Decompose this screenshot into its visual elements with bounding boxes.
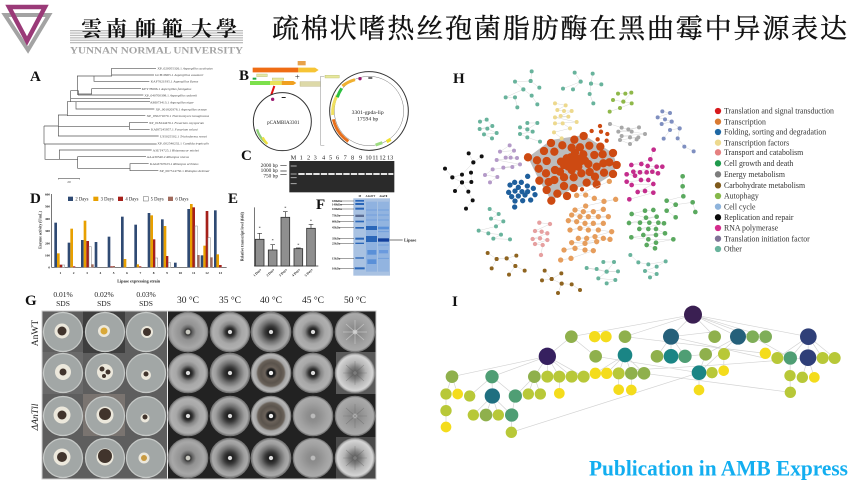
temperature column headers: 35 °C — [219, 295, 241, 306]
plasmid maps: + — [295, 72, 300, 82]
gel with marker labels: 45kDa — [332, 226, 341, 230]
gel with marker labels: 100kDa — [332, 207, 342, 211]
SDS column headers: SDS — [56, 299, 70, 308]
icon: university logo — [5, 7, 49, 50]
temperature column headers: 45 °C — [302, 295, 324, 306]
legend: Cell cycle — [724, 202, 756, 211]
panel E label: E — [228, 191, 238, 207]
tree branches and leaves: KEY78696.1 Aspergillus fumigatus — [142, 87, 192, 91]
tree branches and leaves: ABI073413.1 Aspergillus niger — [150, 100, 195, 104]
bars and axes: 2 Days — [265, 267, 276, 277]
panel D label: D — [30, 191, 41, 207]
bars and axes: * — [297, 243, 299, 248]
gel with marker labels: 140kDa — [332, 202, 342, 206]
legend: Folding, sorting and degradation — [724, 128, 826, 137]
cluster: transport and catabolism — [533, 223, 550, 255]
gel with marker labels: 10kDa — [332, 266, 341, 270]
panel D: enzyme activity bar chart — [30, 191, 227, 283]
panel F label: F — [316, 197, 325, 213]
bars and axes: 3 Days — [278, 267, 288, 277]
bars, axes and legend: 4 Days — [125, 198, 139, 203]
gel image: 750 bp — [263, 174, 278, 180]
strain row labels: ΔAnTll — [31, 403, 41, 431]
university name logotype: 雲南師範大學 — [81, 17, 237, 41]
tree branches and leaves: KAG6767023.1 Rhizopus arrhizus — [150, 162, 199, 166]
gel image: 4 — [322, 154, 326, 161]
gel with marker labels: 180kDa — [332, 199, 342, 203]
SDS column headers: 0.01% — [53, 290, 73, 299]
bars, axes and legend — [39, 192, 227, 283]
title: 疏棉状嗜热丝孢菌脂肪酶在黑曲霉中异源表达 — [272, 7, 847, 46]
gel image: 2 — [307, 154, 310, 161]
temperature column headers: 50 °C — [344, 295, 366, 306]
panel H: protein interaction network — [445, 71, 834, 293]
cluster: folding, sorting and degradation — [509, 176, 535, 207]
panel G label: G — [25, 293, 37, 309]
gel image: 13 — [387, 154, 393, 161]
bars, axes and legend: 600 — [45, 192, 50, 196]
bars, axes and legend: 4 — [99, 271, 101, 275]
legend: Other — [724, 245, 742, 254]
cluster: transcription factors — [554, 103, 577, 138]
panel I label: I — [452, 294, 458, 310]
bars, axes and legend: 300 — [45, 229, 50, 233]
bars, axes and legend: 12 — [205, 271, 209, 275]
clusters: carbohydrate metabolism — [488, 253, 580, 293]
bars, axes and legend: 5 — [113, 271, 115, 275]
tree branches and leaves: XP_020055326.1 Aspergillus aculeatus — [157, 66, 213, 70]
bars, axes and legend: 100 — [45, 254, 50, 258]
tree branches and leaves — [44, 66, 213, 184]
strain row labels: AnWT — [31, 320, 41, 346]
SDS column headers — [53, 290, 156, 308]
bars, axes and legend: 3 Days — [101, 198, 114, 203]
panel C: gel electrophoresis — [241, 148, 394, 192]
bars and axes: Relative transcript level (fold) — [240, 211, 244, 261]
cluster: transcription — [561, 181, 616, 260]
gel image: M — [291, 154, 297, 161]
legend: Translation and signal transduction — [724, 107, 834, 116]
tree branches and leaves: A3UT4725.1 Rhizomucor miehei — [153, 148, 199, 152]
tree branches and leaves: XP_018244476.1 Fusarium oxysporum — [149, 121, 205, 125]
plasmid maps — [250, 61, 408, 151]
clusters: other (teal) — [479, 71, 666, 283]
gel image: 5 — [329, 154, 332, 161]
bars and axes: * — [284, 206, 286, 211]
bars, axes and legend: 2 — [73, 271, 75, 275]
SDS column headers: SDS — [139, 299, 153, 308]
legend: Replication and repair — [724, 213, 794, 222]
panel I: hierarchical GO network — [440, 294, 841, 438]
gel image: 1 — [300, 154, 303, 161]
panel G: petri dish grid — [25, 290, 376, 479]
legend: Energy metabolism — [724, 170, 785, 179]
tree branches and leaves: U35025502.1 Trichoderma reesei — [160, 135, 207, 139]
SDS column headers: 0.02% — [94, 290, 114, 299]
legend: Transcription factors — [724, 138, 789, 147]
panel H label: H — [453, 71, 465, 87]
bars, axes and legend: 13 — [219, 271, 222, 275]
panel B: plasmid construction — [239, 61, 408, 151]
bars, axes and legend: 200 — [45, 241, 50, 245]
bars, axes and legend: 5 Days — [151, 198, 164, 203]
panel A: phylogenetic tree — [30, 66, 213, 184]
SDS column headers: SDS — [97, 299, 111, 308]
cluster: RNA polymerase — [627, 150, 662, 199]
gel image: 11 — [372, 154, 378, 161]
plasmid maps: 17594 bp — [357, 117, 378, 123]
bars, axes and legend: 400 — [45, 217, 50, 221]
temperature column headers: 40 °C — [260, 295, 282, 306]
tree branches and leaves: XP_040700398.1 Aspergillus sydowii — [144, 93, 197, 97]
gel with marker labels: 25kDa — [332, 241, 341, 245]
bars, axes and legend: Lipase expressing strain — [117, 278, 161, 283]
bars, axes and legend: 6 — [126, 271, 128, 275]
bars and axes: * — [259, 225, 261, 230]
university name logotype — [70, 17, 243, 56]
legend: Transcription — [724, 117, 766, 126]
gel image: 8 — [351, 154, 354, 161]
panel C label: C — [241, 148, 252, 164]
bars, axes and legend: 2 Days — [75, 198, 89, 203]
cluster: translation initiation — [485, 145, 520, 182]
legend: Cell growth and death — [724, 159, 793, 168]
bars, axes and legend: 9 — [166, 271, 168, 275]
bars, axes and legend: 0 — [48, 266, 50, 270]
bars, axes and legend: 8 — [153, 271, 155, 275]
legend: Carbohydrate metabolism — [724, 181, 805, 190]
gel image: 9 — [359, 154, 362, 161]
plasmid maps: pCAMBIA3301 — [267, 121, 300, 126]
gel with marker labels: Lipase — [404, 238, 416, 243]
hierarchical graph — [440, 306, 841, 438]
temperature column headers: 30 °C — [177, 295, 199, 306]
cluster: energy metabolism — [610, 124, 645, 144]
bars, axes and legend: 500 — [45, 205, 50, 209]
bars, axes and legend: Enzyme activity (U/mL) — [39, 210, 43, 249]
plate backgrounds — [42, 311, 376, 479]
legend: RNA polymerase — [724, 224, 779, 233]
tree branches and leaves: KAF7621935.1 Aspergillus flavus — [151, 80, 199, 84]
strain row labels — [31, 320, 41, 431]
legend — [715, 107, 834, 254]
tree branches and leaves: XP_001820378.1 Aspergillus oryzae — [156, 107, 207, 111]
tree branches and leaves: XP_050271070.1 Thermomyces lanuginosus — [147, 114, 210, 118]
cluster: translation initiation factor — [658, 111, 694, 151]
temperature column headers — [177, 295, 366, 306]
gel image: 2000 bp — [261, 163, 278, 169]
bars and axes — [240, 206, 318, 277]
tree branches and leaves: 20 — [67, 180, 71, 184]
bars, axes and legend: 11 — [192, 271, 196, 275]
bars, axes and legend: 6 Days — [175, 198, 189, 203]
tree branches and leaves: XP_002546232.1 Candida tropicalis — [157, 142, 209, 146]
gel with marker labels: 60kDa — [332, 219, 341, 223]
panel E: relative transcript bar chart — [228, 191, 318, 277]
gel with marker labels: 15kDa — [332, 256, 341, 260]
gel with marker labels: AnaTll — [379, 195, 388, 198]
university name logotype: YUNNAN NORMAL UNIVERSITY — [70, 46, 243, 56]
plasmid maps: 3301-gpda-lip — [352, 110, 384, 116]
panel F: SDS-PAGE gel — [316, 195, 416, 276]
SDS column headers: 0.03% — [136, 290, 156, 299]
bars, axes and legend: 1 — [59, 271, 61, 275]
cluster: replication and repair — [445, 153, 482, 209]
gel with marker labels: 35kDa — [332, 236, 341, 240]
temperature plates — [168, 312, 375, 478]
bars and axes: 5 Days — [304, 267, 314, 277]
bars and axes: 4 Days — [291, 267, 301, 277]
bars, axes and legend: 10 — [179, 271, 182, 275]
tree branches and leaves: AAA30540.2 Rhizopus niveus — [147, 155, 190, 159]
gel image: 7 — [344, 154, 347, 161]
bars and axes: 1 Days — [252, 267, 263, 277]
gel with marker labels — [332, 195, 416, 276]
tree branches and leaves: KAI87245957.1 Fusarium solani — [151, 128, 198, 132]
gel with marker labels: 75kDa — [332, 214, 341, 218]
cluster: cell growth and death — [629, 176, 695, 248]
gel image: 6 — [336, 154, 339, 161]
legend: Transport and catabolism — [724, 148, 803, 157]
gel image: 3 — [314, 154, 317, 161]
cluster: autophagy — [610, 93, 632, 112]
SDS plates with colonies — [44, 312, 166, 478]
bars, axes and legend: 7 — [139, 271, 141, 275]
cluster: translation and signal transduction — [528, 126, 617, 201]
gel image: 10 — [365, 154, 372, 161]
panel B label: B — [239, 68, 249, 84]
bars and axes: * — [310, 219, 312, 224]
network graph — [445, 71, 834, 293]
footer: publication note: Publication in AMB Express — [589, 456, 848, 480]
panel A label: A — [30, 69, 41, 85]
gel with marker labels: ΔAnWT — [366, 195, 375, 198]
gel image: 1000 bp — [261, 168, 278, 174]
legend: Autophagy — [724, 192, 759, 201]
gel image — [261, 154, 394, 192]
bars and axes: * — [272, 238, 274, 243]
gel image: 12 — [379, 154, 386, 161]
bars, axes and legend: 3 — [86, 271, 88, 275]
legend: Translation initiation factor — [724, 234, 810, 243]
tree branches and leaves: XP_067514750.1 Rhizopus delemar — [159, 169, 210, 173]
gel with marker labels: M — [359, 195, 362, 198]
tree branches and leaves: GCB19905.1 Aspergillus awamori — [155, 73, 203, 77]
